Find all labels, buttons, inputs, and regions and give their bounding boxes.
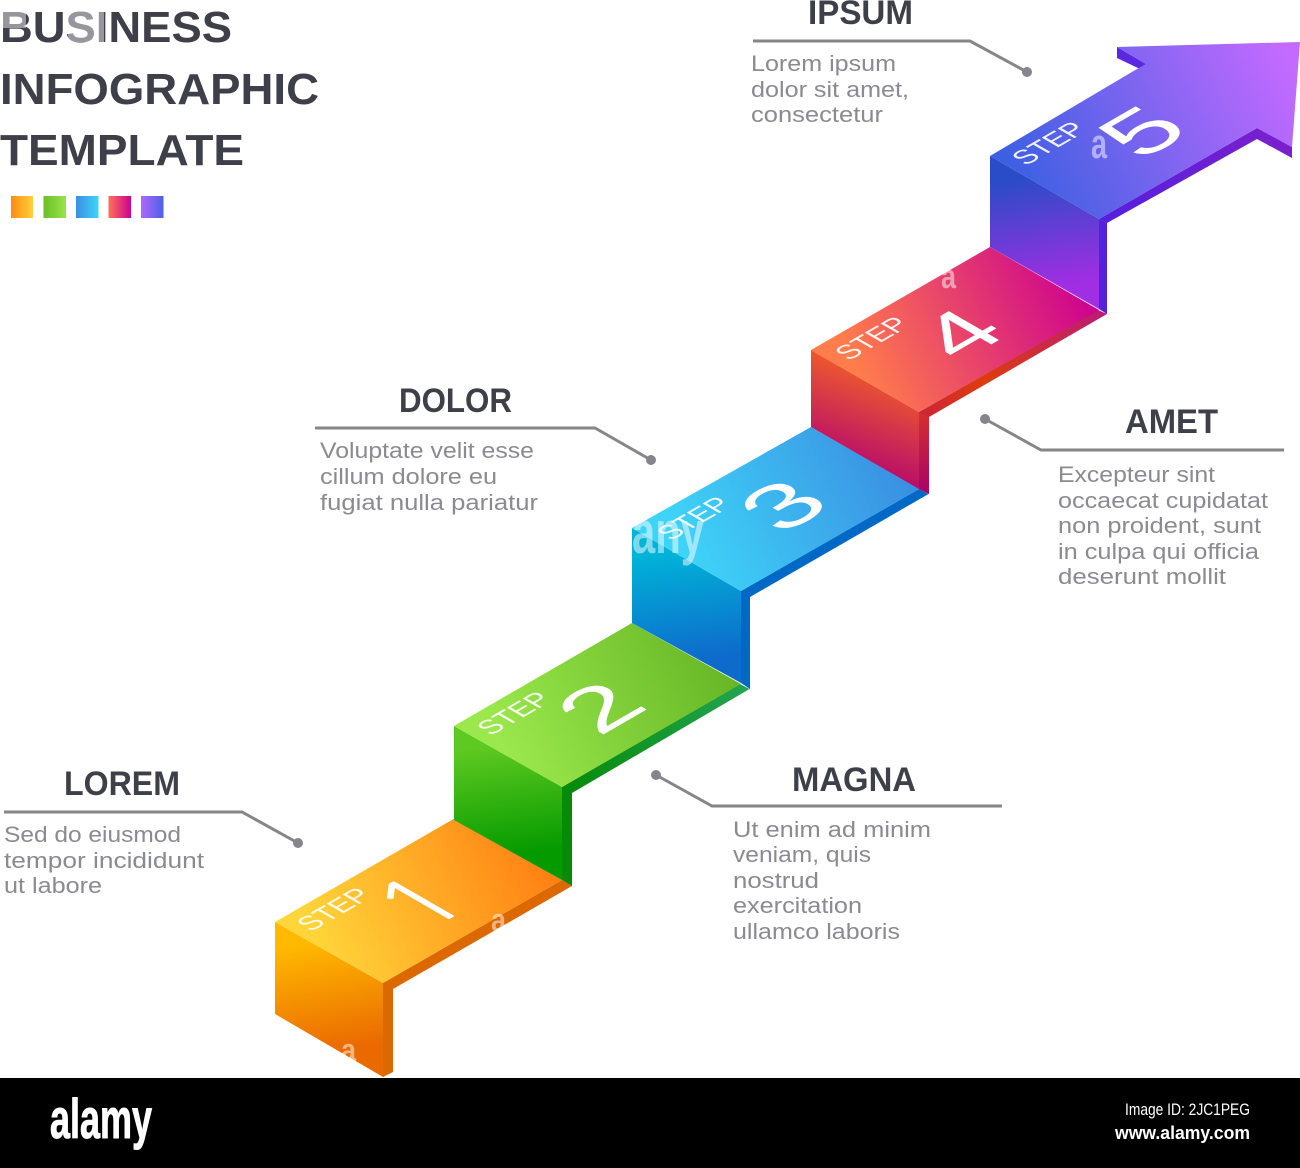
callout: amet: non proident, sunt bbox=[1058, 513, 1261, 538]
step 2 block bbox=[454, 623, 750, 886]
callout: lorem: ut labore bbox=[4, 873, 102, 898]
callout: dolor: fugiat nulla pariatur bbox=[320, 490, 538, 515]
title: INFOGRAPHIC bbox=[0, 65, 319, 114]
step 1 block bbox=[275, 819, 572, 1077]
callout: dolor bbox=[315, 382, 656, 515]
callout: amet: AMET bbox=[1125, 403, 1218, 441]
step 4 block: 4 bbox=[895, 296, 1026, 372]
callout: magna: exercitation bbox=[733, 893, 862, 918]
title: BUSINESS bbox=[0, 3, 232, 52]
callout: magna: Ut enim ad minim bbox=[733, 817, 931, 842]
step 5 arrow bbox=[990, 42, 1300, 314]
step 3 block bbox=[632, 427, 928, 689]
colour swatches bbox=[11, 196, 164, 218]
step 2 block: 2 bbox=[533, 669, 667, 746]
callout: lorem bbox=[4, 765, 303, 898]
title bbox=[0, 3, 319, 175]
callout: amet: deserunt mollit bbox=[1058, 564, 1226, 589]
step 3 block: STEP bbox=[649, 492, 739, 544]
callout: magna: veniam, quis bbox=[733, 842, 871, 867]
stock watermark fragments bbox=[341, 120, 1107, 1068]
callout: amet: occaecat cupidatat bbox=[1058, 488, 1268, 513]
callout: ipsum: consectetur bbox=[751, 102, 883, 127]
callout: magna: nostrud bbox=[733, 868, 819, 893]
stock watermark fragments: any bbox=[632, 499, 704, 566]
stock watermark fragments: a bbox=[341, 1032, 356, 1068]
callout: magna: MAGNA bbox=[792, 761, 916, 799]
step 5 arrow: 5 bbox=[1075, 93, 1209, 170]
stock watermark fragments: a bbox=[491, 902, 506, 938]
footer bar: Image ID: 2JC1PEG bbox=[1125, 1100, 1250, 1119]
callout: ipsum: dolor sit amet, bbox=[751, 77, 909, 102]
callout: ipsum bbox=[751, 0, 1032, 127]
callout: dolor: DOLOR bbox=[399, 382, 512, 420]
footer bar: www.alamy.com bbox=[1114, 1123, 1250, 1143]
title: TEMPLATE bbox=[0, 126, 244, 175]
footer bar bbox=[0, 1078, 1300, 1168]
step 2 block: STEP bbox=[469, 687, 559, 739]
stock watermark fragments: a bbox=[1091, 120, 1107, 167]
step 5 arrow: STEP bbox=[1004, 117, 1094, 169]
callout: amet: Excepteur sint bbox=[1058, 462, 1215, 487]
callout: amet bbox=[980, 403, 1284, 589]
footer bar: alamy bbox=[50, 1087, 152, 1150]
callout: dolor: cillum dolore eu bbox=[320, 464, 497, 489]
stock watermark fragments: a bbox=[941, 258, 957, 296]
callout: magna bbox=[651, 761, 1002, 944]
title and heading watermark smudges bbox=[2, 10, 104, 796]
callout: amet: in culpa qui officia bbox=[1058, 539, 1260, 564]
callout: lorem: tempor incididunt bbox=[4, 848, 204, 873]
callout: ipsum: Lorem ipsum bbox=[751, 51, 896, 76]
callout: dolor: Voluptate velit esse bbox=[320, 438, 534, 463]
callout: lorem: Sed do eiusmod bbox=[4, 822, 181, 847]
callout: magna: ullamco laboris bbox=[733, 919, 900, 944]
callout: lorem: LOREM bbox=[64, 765, 180, 803]
step 1 block: 1 bbox=[356, 865, 485, 940]
step 4 block bbox=[811, 247, 1107, 494]
step 4 block: STEP bbox=[827, 312, 917, 364]
step 3 block: 3 bbox=[716, 467, 850, 544]
step 1 block: STEP bbox=[289, 883, 379, 935]
